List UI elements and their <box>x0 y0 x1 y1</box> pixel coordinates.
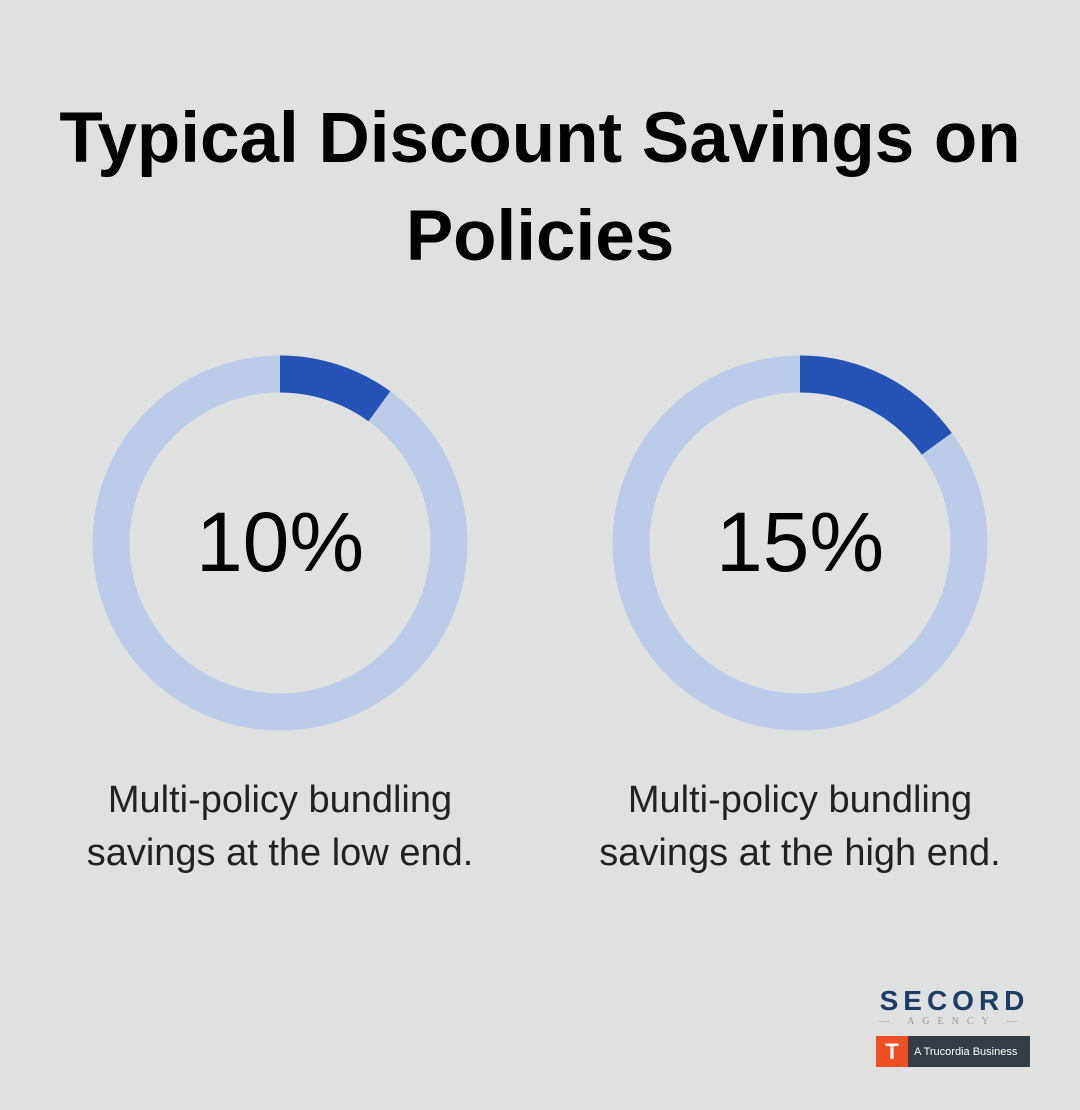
caption: low end: Multi-policy bundling <box>108 779 452 821</box>
donut: 15% <box>631 374 969 712</box>
caption: low end <box>87 779 473 874</box>
caption: high end <box>599 779 1001 874</box>
donut: 15%: 15% <box>716 495 884 589</box>
logo: T <box>885 1039 899 1064</box>
title <box>59 99 1021 276</box>
title: Typical Discount Savings on <box>59 99 1021 178</box>
caption: low end: savings at the low end. <box>87 832 473 874</box>
logo <box>876 985 1030 1067</box>
donut: 10% <box>111 374 449 712</box>
donut: 10%: 10% <box>196 495 364 589</box>
caption: high end: Multi-policy bundling <box>628 779 972 821</box>
logo: SECORD <box>880 985 1029 1016</box>
title: Policies <box>406 197 674 276</box>
caption: high end: savings at the high end. <box>599 832 1001 874</box>
logo: — AGENCY — <box>879 1016 1025 1027</box>
logo: A Trucordia Business <box>914 1046 1017 1058</box>
